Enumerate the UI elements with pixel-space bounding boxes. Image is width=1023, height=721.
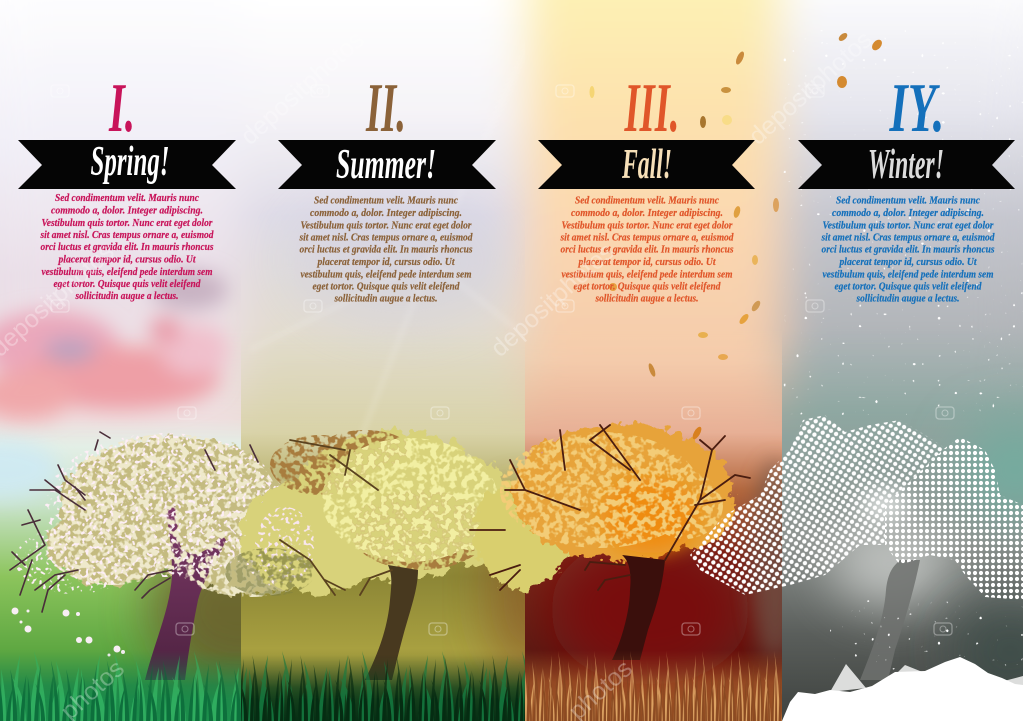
text block: spring: commodo a, dolor. Integer adipiscing.: [51, 206, 203, 216]
fall trunk: [612, 555, 665, 660]
text block: summer: sollicitudin augue a lectus.: [334, 294, 438, 304]
text block: spring: Sed condimentum velit. Mauris nunc: [55, 193, 199, 204]
summer branches: [280, 440, 392, 595]
snow speckle upper: [782, 30, 1023, 415]
ribbon: spring: [18, 139, 236, 189]
snow speckle lower: [830, 600, 1023, 670]
summer pale leaves: [322, 438, 500, 562]
winter snow mound back peaks: [830, 664, 1023, 700]
text block: winter: eget tortor. Quisque quis velit eleifend: [834, 282, 982, 292]
winter snow mound: [782, 657, 1023, 721]
text block: winter: Sed condimentum velit. Mauris nunc: [836, 196, 980, 206]
text block: fall: Vestibulum quis tortor. Nunc erat eget dolor: [562, 220, 733, 232]
text block: summer: placerat tempor id, cursus odio. Ut: [317, 257, 455, 268]
text block: fall: orci luctus et gravida elit. In mauris rhoncus: [560, 244, 734, 256]
text block: fall: vestibulum quis, eleifend pede interdum sem: [562, 270, 732, 280]
numeral II: II.: [365, 70, 406, 147]
winter trunk: [860, 560, 920, 680]
text block: summer: Vestibulum quis tortor. Nunc erat eget dolor: [300, 220, 472, 232]
watermarks: depositphotos: [235, 25, 370, 150]
background: spring panel glows and clouds: [0, 262, 241, 684]
summer blossoms overlap: [255, 507, 315, 583]
fall branches: [470, 425, 750, 590]
grass: summer: [241, 651, 525, 721]
icon: tree, fall: [470, 424, 750, 660]
watermarks: depositphotos: [485, 237, 620, 362]
text block: spring: Vestibulum quis tortor. Nunc erat eget dolor: [42, 218, 213, 229]
fall left yellow foliage: [474, 480, 570, 590]
background: winter panel glows: [830, 420, 1023, 700]
text block: summer: sit amet nisl. Cras tempus ornare a, euismod: [299, 232, 473, 244]
spring trunk: [145, 506, 226, 680]
background: fall panel glows: [550, 460, 800, 685]
heading: Spring!: Spring!: [90, 139, 170, 185]
icon: tree, winter halftone: [690, 415, 1023, 721]
fall pale leaves: [500, 432, 723, 548]
grass: spring: [0, 650, 241, 721]
numeral I: I.: [108, 70, 135, 147]
text block: summer: commodo a, dolor. Integer adipiscing.: [310, 208, 462, 219]
panel: spring header: [18, 70, 236, 302]
text block: winter: orci luctus et gravida elit. In mauris rhoncus: [822, 244, 994, 256]
text block: summer: eget tortor. Quisque quis velit eleifend: [312, 282, 460, 292]
watermarks: depositphotos: [743, 25, 878, 150]
text block: summer: [299, 196, 473, 304]
winter dots right: [885, 437, 1023, 600]
text block: fall: [560, 196, 734, 304]
text block: spring: placerat tempor id, cursus odio. Ut: [58, 254, 196, 266]
text block: winter: Vestibulum quis tortor. Nunc erat eget dolor: [822, 220, 994, 232]
text block: summer: orci luctus et gravida elit. In mauris rhoncus: [300, 244, 472, 256]
text block: spring: [40, 193, 214, 302]
text block: fall: placerat tempor id, cursus odio. Ut: [578, 257, 716, 268]
text block: spring: eget tortor. Quisque quis velit eleifend: [54, 279, 201, 290]
text block: winter: sit amet nisl. Cras tempus ornare a, euismod: [821, 232, 995, 244]
panel: summer header: [278, 70, 496, 304]
text block: spring: sit amet nisl. Cras tempus ornare a, euismod: [40, 230, 214, 241]
icon: tree, summer: [225, 430, 513, 680]
text block: summer: Sed condimentum velit. Mauris nunc: [314, 196, 458, 206]
numeral III: III.: [624, 70, 680, 147]
text block: winter: [821, 196, 995, 304]
icon: tree, spring blossom: [10, 432, 335, 680]
summer brown leaves: [270, 430, 490, 570]
text block: fall: sollicitudin augue a lectus.: [595, 294, 698, 304]
text block: winter: commodo a, dolor. Integer adipiscing.: [832, 208, 984, 219]
winter dots left: [690, 415, 885, 595]
heading: Fall!: Fall!: [621, 142, 672, 188]
spring bare branches: [10, 432, 258, 612]
ribbon: winter: [798, 140, 1015, 189]
heading: Summer!: Summer!: [336, 142, 436, 188]
ribbon: summer: [278, 140, 496, 189]
text block: fall: sit amet nisl. Cras tempus ornare a, euismod: [560, 232, 734, 244]
winter bright center: [861, 489, 909, 521]
ribbon: fall: [538, 140, 755, 189]
text block: fall: eget tortor. Quisque quis velit eleifend: [574, 282, 721, 292]
numeral IV: IY.: [889, 70, 944, 147]
text block: spring: vestibulum quis, eleifend pede interdum sem: [42, 267, 212, 278]
summer dark lower leaves: [225, 548, 315, 596]
text block: fall: Sed condimentum velit. Mauris nunc: [575, 196, 719, 206]
text block: summer: vestibulum quis, eleifend pede interdum sem: [300, 270, 472, 280]
spring leaves cream: [46, 434, 335, 597]
falling petals: [12, 608, 125, 656]
spring foliage: [47, 437, 335, 595]
text block: spring: orci luctus et gravida elit. In mauris rhoncus: [40, 242, 214, 253]
winter dots top: [845, 420, 945, 505]
summer trunk: [365, 565, 418, 680]
background: soft blend between bands at the top: [234, 0, 811, 422]
text block: spring: sollicitudin augue a lectus.: [75, 291, 178, 302]
background: summer panel glows: [250, 40, 570, 680]
falling autumn leaves: [590, 31, 884, 441]
text block: winter: sollicitudin augue a lectus.: [856, 294, 960, 304]
summer foliage: [240, 430, 513, 593]
pink clouds: [0, 270, 229, 420]
spring blossoms: [15, 433, 320, 594]
text block: winter: placerat tempor id, cursus odio. Ut: [839, 257, 977, 268]
text block: winter: vestibulum quis, eleifend pede interdum sem: [822, 270, 994, 280]
grass: fall: [525, 650, 782, 721]
fall orange core: [600, 477, 700, 553]
panel: fall header: [538, 70, 755, 304]
panel: winter header: [798, 70, 1015, 304]
heading: Winter!: Winter!: [868, 142, 944, 188]
text block: fall: commodo a, dolor. Integer adipiscing.: [571, 208, 723, 219]
fall foliage: [512, 424, 732, 560]
